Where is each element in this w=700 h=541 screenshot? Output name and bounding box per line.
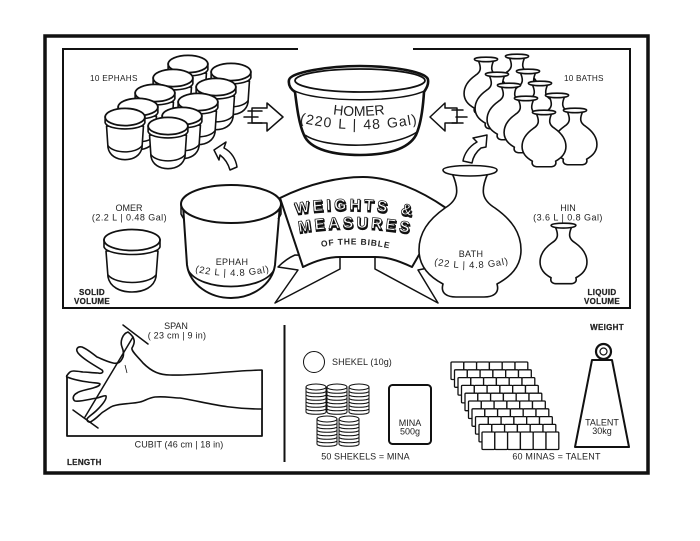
- label: solid volume: VOLUME: [74, 297, 110, 306]
- subtitle: OF THE BIBLE: [321, 238, 390, 248]
- title shadow: WEIGHTS &: [294, 200, 412, 218]
- label: minas equal talent: 60 MINAS = TALENT: [512, 452, 601, 462]
- label: span: [148, 321, 206, 340]
- panel: weight: [304, 323, 629, 462]
- title shadow: MEASURES: [298, 218, 410, 234]
- icon: ten ephah jars: [105, 55, 251, 169]
- label: mina: [399, 418, 421, 436]
- panel: volume frame: [63, 49, 630, 308]
- label: shekel: SHEKEL (10g): [332, 357, 392, 367]
- label: omer: (2.2 L | 0.48 Gal): [92, 212, 167, 222]
- label: homer name: HOMER: [334, 104, 384, 116]
- label: ephah: [196, 257, 268, 278]
- label: span: ( 23 cm | 9 in): [148, 330, 206, 340]
- label: 10 baths: 10 BATHS: [564, 74, 604, 83]
- icon: arrow into homer from left: [244, 103, 283, 131]
- label: length: LENGTH: [67, 458, 102, 467]
- icon: ephah jar: [181, 185, 281, 298]
- label: liquid volume: LIQUID: [588, 288, 616, 297]
- title shadow: [294, 200, 412, 234]
- banner: [274, 176, 446, 304]
- icon: bath vase: [419, 166, 521, 297]
- ribbon: [280, 177, 446, 267]
- title: WEIGHTS &: [294, 198, 412, 216]
- label: bath: BATH: [459, 249, 483, 259]
- label: solid volume: SOLID: [79, 288, 105, 297]
- icon: mina: [389, 385, 431, 444]
- icon: homer bowl: [288, 64, 430, 156]
- label: talent: TALENT: [585, 418, 619, 428]
- label: bath: [434, 249, 508, 270]
- icon: curved arrow from ephah: [214, 142, 237, 170]
- title: [294, 198, 412, 232]
- label: weight: WEIGHT: [590, 323, 624, 332]
- panel: length: [67, 321, 262, 467]
- label: homer volume: (220 L | 48 Gal): [300, 113, 416, 132]
- left tail: [275, 255, 340, 303]
- label: span: SPAN: [164, 321, 188, 331]
- icon: ten bath vases: [464, 54, 597, 167]
- outer frame: [45, 36, 648, 473]
- label: shekels equal mina: 50 SHEKELS = MINA: [321, 452, 410, 462]
- label: omer: OMER: [116, 203, 143, 213]
- label: liquid volume: VOLUME: [584, 297, 620, 306]
- label: talent: 30kg: [592, 426, 612, 436]
- label: hin: (3.6 L | 0.8 Gal): [533, 212, 603, 222]
- icon: coin stacks: [306, 384, 369, 446]
- label: mina: MINA: [399, 418, 421, 428]
- label: liquid volume: [584, 288, 620, 306]
- label: solid volume: [74, 288, 110, 306]
- label: ephah: EPHAH: [216, 257, 248, 267]
- title: MEASURES: [298, 216, 410, 232]
- icon: omer jar: [104, 230, 160, 292]
- label: mina: 500g: [400, 426, 420, 436]
- icon: arrow into homer from right: [430, 103, 467, 131]
- icon: talent weight: [575, 344, 629, 447]
- right tail: [375, 252, 438, 303]
- icon: hin vase: [540, 223, 587, 284]
- label: bath: (22 L | 4.8 Gal): [434, 258, 508, 270]
- label: hin: HIN: [560, 203, 576, 213]
- label: hin: [533, 203, 603, 222]
- label: ephah: (22 L | 4.8 Gal): [196, 266, 268, 278]
- label: talent: [585, 418, 619, 436]
- label: omer: [92, 203, 167, 222]
- icon: sixty minas: [451, 362, 559, 450]
- label: cubit: CUBIT (46 cm | 18 in): [135, 440, 223, 450]
- icon: arm: [67, 325, 262, 436]
- icon: shekel coin: [304, 352, 324, 372]
- divider: [284, 325, 286, 462]
- icon: curved arrow from bath: [463, 135, 487, 163]
- label: 10 ephahs: 10 EPHAHS: [90, 74, 138, 83]
